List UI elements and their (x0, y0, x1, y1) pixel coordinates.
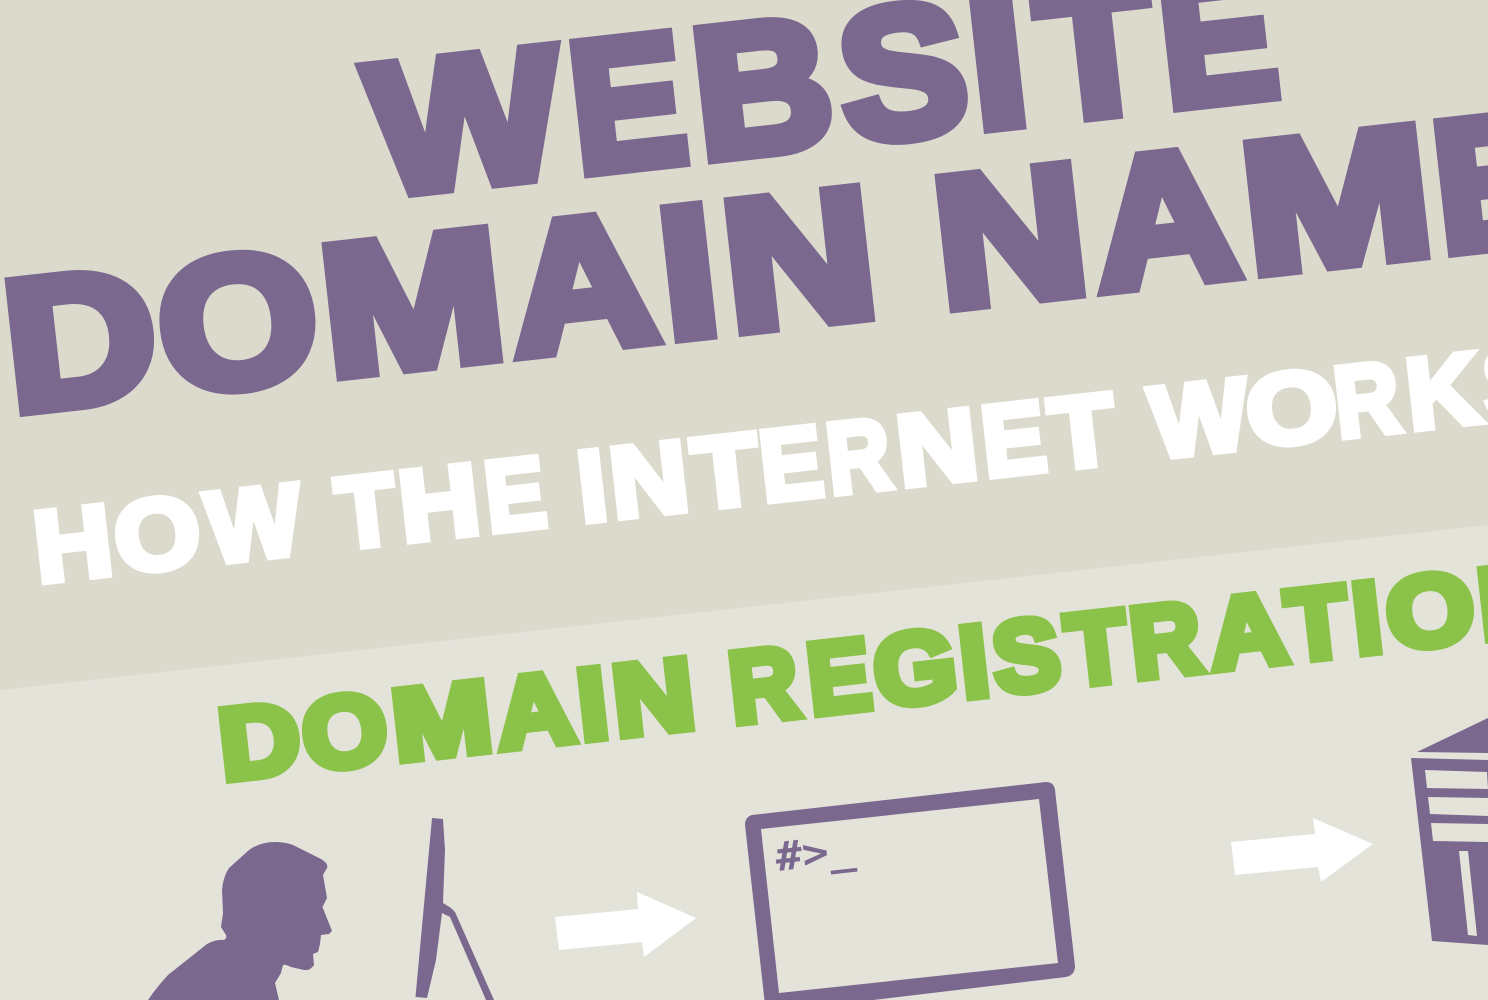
title: WEBSITE DOMAIN NAMES: N (924, 125, 1097, 348)
icon: registry building (1411, 718, 1488, 945)
section heading: DOMAIN REGISTRATION: I (954, 605, 994, 719)
title: WEBSITE DOMAIN NAMES: W (359, 8, 572, 235)
subtitle: HOW THE INTERNET WORKS: T (1044, 373, 1121, 491)
icon: terminal window (745, 782, 1075, 1000)
title: WEBSITE DOMAIN NAMES: A (1082, 109, 1247, 330)
subtitle: HOW THE INTERNET WORKS: W (201, 463, 307, 585)
subtitle: HOW THE INTERNET WORKS: N (604, 420, 694, 540)
section heading: DOMAIN REGISTRATION: S (987, 597, 1065, 716)
title: WEBSITE DOMAIN NAMES: A (498, 173, 665, 395)
arrow: person to terminal (555, 892, 696, 957)
subtitle: HOW THE INTERNET WORKS (28, 323, 1488, 604)
subtitle: HOW THE INTERNET WORKS: T (331, 453, 402, 571)
subtitle: HOW THE INTERNET WORKS: E (976, 380, 1051, 499)
title: WEBSITE DOMAIN NAMES: M (311, 190, 514, 416)
subtitle: HOW THE INTERNET WORKS: K (1401, 332, 1485, 452)
section heading: DOMAIN REGISTRATION: A (490, 651, 579, 771)
section heading: DOMAIN REGISTRATION: M (387, 660, 497, 782)
subtitle: HOW THE INTERNET WORKS: O (1240, 348, 1343, 469)
subtitle: HOW THE INTERNET WORKS: N (891, 388, 983, 508)
subtitle: HOW THE INTERNET WORKS: H (393, 443, 485, 564)
subtitle: HOW THE INTERNET WORKS: E (479, 436, 551, 554)
section heading: DOMAIN REGISTRATION: D (213, 682, 306, 802)
section heading: DOMAIN REGISTRATION: E (802, 618, 876, 736)
subtitle: HOW THE INTERNET WORKS: O (109, 475, 206, 595)
subtitle: HOW THE INTERNET WORKS: W (1145, 358, 1254, 480)
title: WEBSITE DOMAIN NAMES: N (713, 149, 886, 371)
section heading: DOMAIN REGISTRATION: I (572, 647, 613, 762)
subtitle: HOW THE INTERNET WORKS: E (754, 405, 828, 523)
title: WEBSITE DOMAIN NAMES (0, 0, 1488, 451)
subtitle: HOW THE INTERNET WORKS: T (687, 412, 765, 531)
section heading: DOMAIN REGISTRATION: O (1381, 551, 1480, 672)
section heading: DOMAIN REGISTRATION: T (1061, 590, 1133, 707)
icon: desktop monitor (416, 818, 494, 1000)
section heading: DOMAIN REGISTRATION: A (1203, 572, 1292, 692)
title: WEBSITE DOMAIN NAMES: M (1232, 87, 1442, 313)
title: WEBSITE DOMAIN NAMES: O (148, 211, 328, 434)
title: WEBSITE DOMAIN NAMES: I (650, 166, 728, 378)
section heading: DOMAIN REGISTRATION: R (1125, 581, 1207, 700)
section heading: DOMAIN REGISTRATION: G (868, 608, 962, 729)
terminal prompt: #>_ (773, 826, 859, 881)
subtitle: HOW THE INTERNET WORKS: R (821, 398, 896, 516)
section heading: DOMAIN REGISTRATION (213, 541, 1488, 802)
section heading: DOMAIN REGISTRATION: N (607, 638, 700, 758)
subtitle: HOW THE INTERNET WORKS: H (28, 484, 118, 604)
icon: person silhouette (148, 842, 332, 1000)
section heading: DOMAIN REGISTRATION: I (1347, 561, 1387, 676)
section heading: DOMAIN REGISTRATION: O (297, 672, 393, 792)
subtitle: HOW THE INTERNET WORKS: R (1329, 341, 1405, 460)
subtitle: HOW THE INTERNET WORKS: I (572, 429, 612, 544)
section heading: DOMAIN REGISTRATION: R (724, 626, 804, 745)
panel: upper header background (0, 0, 1488, 690)
arrow: terminal to registry (1231, 818, 1373, 882)
section heading: DOMAIN REGISTRATION: T (1281, 565, 1354, 683)
